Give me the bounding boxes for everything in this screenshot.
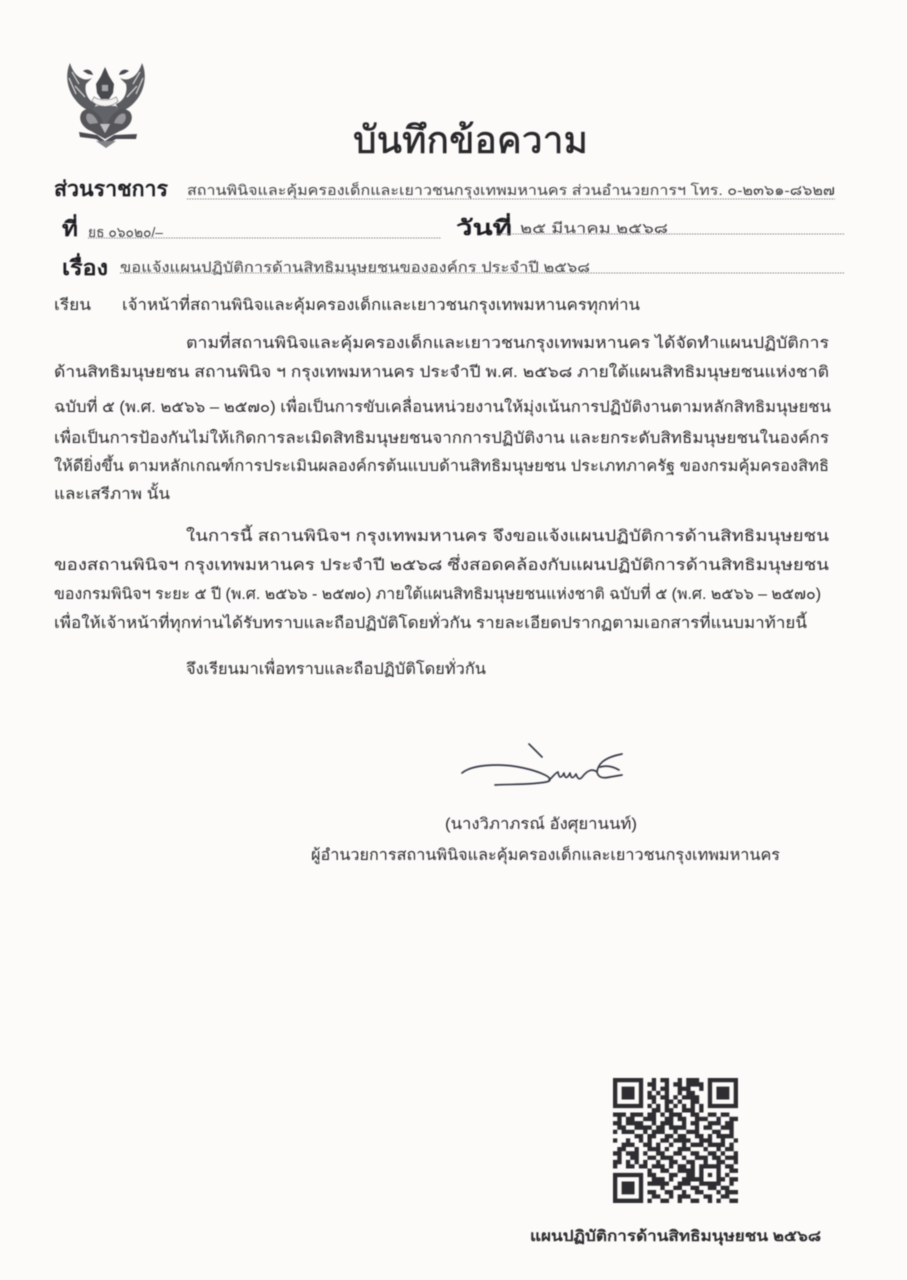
header: subject row: ขอแจ้งแผนปฏิบัติการด้านสิทธิมนุษยชนขององค์กร ประจำปี ๒๕๖๘ bbox=[120, 259, 590, 276]
text block: first paragraph: ด้านสิทธิมนุษยชน สถานพินิจ ฯ กรุงเทพมหานคร ประจำปี พ.ศ. ๒๕๖๘ ภายใต้แผนสิทธิมนุษยชนแห่งชาติ bbox=[54, 363, 829, 382]
signature bbox=[462, 744, 622, 785]
title: บันทึกข้อความ bbox=[353, 120, 588, 162]
header: department row: สถานพินิจและคุ้มครองเด็กและเยาวชนกรุงเทพมหานคร ส่วนอำนวยการฯ โทร. ๐-๒๓๖๑-๘๖๒๗ bbox=[187, 181, 835, 199]
closing line: จึงเรียนมาเพื่อทราบและถือปฏิบัติโดยทั่วกัน bbox=[186, 658, 486, 678]
salutation: เจ้าหน้าที่สถานพินิจและคุ้มครองเด็กและเยาวชนกรุงเทพมหานครทุกท่าน bbox=[122, 294, 640, 315]
text block: second paragraph: ของกรมพินิจฯ ระยะ ๕ ปี (พ.ศ. ๒๕๖๖ - ๒๕๗๐) ภายใต้แผนสิทธิมนุษยชนแห่งชาติ ฉบับที่ ๕ (พ.ศ. ๒๕๖๖ – ๒๕๗๐) bbox=[54, 583, 821, 604]
header: reference number and date row: ที่ bbox=[62, 213, 78, 241]
header: subject row bbox=[62, 252, 844, 280]
text block: first paragraph: ให้ดียิ่งขึ้น ตามหลักเกณฑ์การประเมินผลองค์กรต้นแบบด้านสิทธิมนุษยชน ประเภทภาครัฐ ของกรมคุ้มครองสิทธิ bbox=[54, 454, 829, 476]
salutation: เรียน bbox=[54, 297, 91, 314]
icon: Garuda emblem bbox=[67, 63, 145, 148]
header: department row: ส่วนราชการ bbox=[54, 178, 169, 201]
signatory title: ผู้อำนวยการสถานพินิจและคุ้มครองเด็กและเยาวชนกรุงเทพมหานคร bbox=[311, 845, 780, 865]
salutation bbox=[54, 294, 640, 315]
text block: first paragraph: เพื่อเป็นการป้องกันไม่ให้เกิดการละเมิดสิทธิมนุษยชนจากการปฏิบัติงาน และยกระดับสิทธิมนุษยชนในองค์กร bbox=[54, 427, 829, 448]
header: reference number and date row: วันที่ bbox=[456, 212, 512, 240]
text block: second paragraph bbox=[54, 524, 829, 633]
text block: first paragraph: ฉบับที่ ๕ (พ.ศ. ๒๕๖๖ – ๒๕๗๐) เพื่อเป็นการขับเคลื่อนหน่วยงานให้มุ่งเน้นการปฏิบัติงานตามหลักสิทธิมนุษยชน bbox=[54, 396, 831, 417]
header: reference number and date row: ๒๕ มีนาคม ๒๕๖๘ bbox=[520, 220, 668, 236]
header: department row bbox=[54, 178, 835, 201]
header: subject row: เรื่อง bbox=[62, 252, 108, 280]
QR code bbox=[613, 1080, 738, 1201]
text block: second paragraph: ของสถานพินิจฯ กรุงเทพมหานคร ประจำปี ๒๕๖๘ ซึ่งสอดคล้องกับแผนปฏิบัติการด้านสิทธิมนุษยชน bbox=[54, 554, 829, 575]
text block: first paragraph: และเสรีภาพ นั้น bbox=[54, 482, 170, 503]
QR caption: แผนปฏิบัติการด้านสิทธิมนุษยชน ๒๕๖๘ bbox=[530, 1227, 821, 1246]
text block: second paragraph: เพื่อให้เจ้าหน้าที่ทุกท่านได้รับทราบและถือปฏิบัติโดยทั่วกัน รายละเอียดปรากฏตามเอกสารที่แนบมาท้ายนี้ bbox=[54, 611, 807, 633]
header: reference number and date row bbox=[62, 212, 844, 241]
header: reference number and date row: ยธ ๐๖๐๒๐/– bbox=[88, 224, 163, 240]
text block: first paragraph bbox=[54, 332, 831, 503]
text block: first paragraph: ตามที่สถานพินิจและคุ้มครองเด็กและเยาวชนกรุงเทพมหานคร ได้จัดทำแผนปฏิบัติการ bbox=[186, 332, 829, 353]
text block: second paragraph: ในการนี้ สถานพินิจฯ กรุงเทพมหานคร จึงขอแจ้งแผนปฏิบัติการด้านสิทธิมนุษยชน bbox=[186, 524, 829, 546]
signatory name: (นางวิภาภรณ์ อังศุยานนท์) bbox=[445, 815, 637, 834]
